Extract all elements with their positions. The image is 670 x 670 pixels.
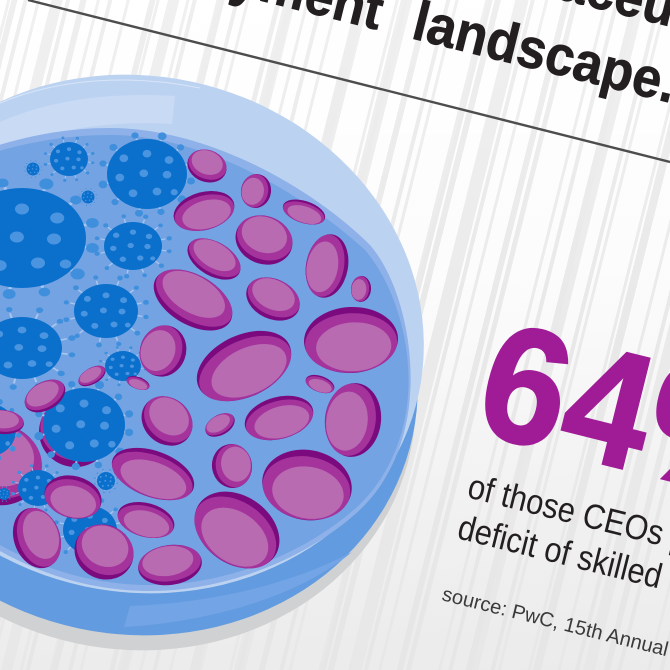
viruses	[0, 132, 195, 562]
red blood cells	[0, 144, 400, 589]
title	[77, 0, 670, 115]
rim highlight band	[0, 95, 175, 150]
dish rim	[0, 22, 472, 646]
dish shadow	[0, 79, 464, 670]
cell behind virus: left	[0, 413, 53, 517]
rim highlight line	[0, 80, 200, 103]
cell behind virus: centre	[33, 391, 117, 473]
source note: source: PwC, 15th Annual	[440, 584, 670, 661]
petri dish illustration	[0, 22, 472, 670]
inner wall	[0, 128, 411, 591]
divider line	[28, 0, 670, 162]
dish base	[0, 64, 466, 670]
base highlight	[124, 552, 352, 627]
description text: deficit of skilled	[454, 507, 666, 596]
description text	[454, 466, 670, 596]
culture surface	[0, 135, 409, 585]
